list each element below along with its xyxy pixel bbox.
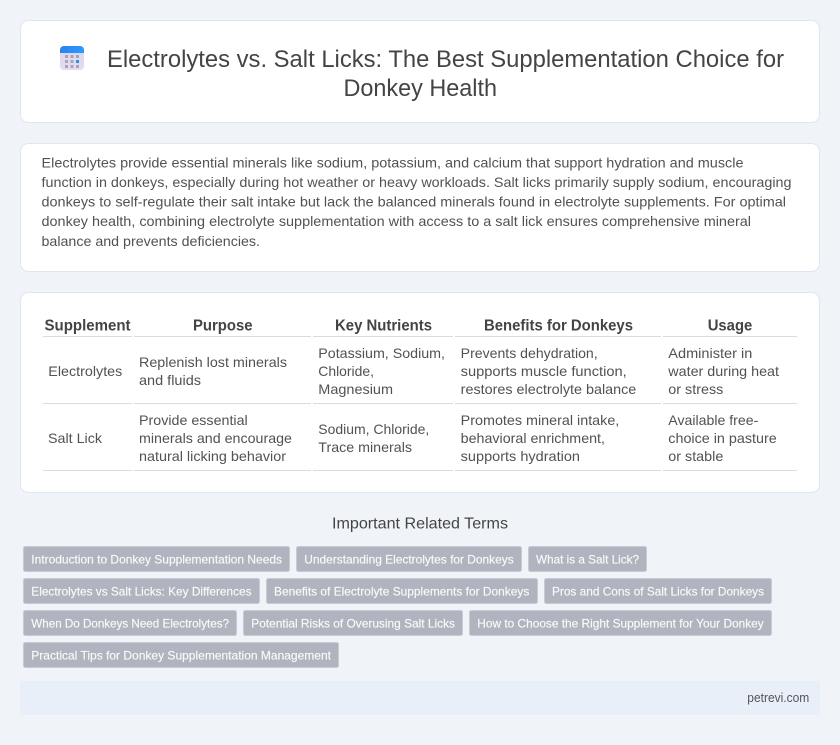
title [107,46,784,102]
tag: When Do Donkeys Need Electrolytes? [31,616,229,630]
table row: electrolytes: Electrolytes [48,363,122,379]
table header row: Key Nutrients [335,318,432,335]
table row: salt lick: minerals and encourage [139,430,292,446]
heading: important related terms: Important Related Terms [332,516,508,532]
table header row: Benefits for Donkeys [484,318,633,335]
table header row: Usage [708,318,752,335]
table row: electrolytes: or stress [668,381,723,397]
panel: header [20,20,820,122]
table header row: Supplement [44,318,131,335]
table row: electrolytes: Magnesium [318,381,393,397]
table row: salt lick: Trace minerals [318,439,412,455]
table row: electrolytes: restores electrolyte balance [461,381,637,397]
tag: Electrolytes vs Salt Licks: Key Differences [31,584,251,598]
tag: Introduction to Donkey Supplementation Needs [31,552,282,566]
text block: intro paragraph: donkeys to self-regulate their salt intake but lack the balanced minerals found in electrolyte supplements. For optimal [42,194,786,210]
table row: salt lick [43,412,797,471]
table row: salt lick: Available free- [668,412,759,428]
panel: related term tags [24,546,772,668]
tag [244,610,462,636]
title: Donkey Health [344,75,497,102]
table row: electrolytes: and fluids [139,372,201,388]
tag: What is a Salt Lick? [536,552,639,566]
table row: electrolytes: Prevents dehydration, [461,345,598,361]
tag: Practical Tips for Donkey Supplementation Management [31,648,332,662]
table row: salt lick: behavioral enrichment, [461,430,605,446]
table row: salt lick: Promotes mineral intake, [461,412,619,428]
icon: calendar [60,46,84,70]
tag [24,546,290,572]
tag: Potential Risks of Overusing Salt Licks [251,616,455,630]
tag [470,610,772,636]
table row: electrolytes: supports muscle function, [461,363,627,379]
table row: electrolytes: Administer in [668,345,752,361]
table row: salt lick: Provide essential [139,412,248,428]
tag [296,546,522,572]
tag: Benefits of Electrolyte Supplements for Donkeys [274,584,529,598]
tag [544,578,772,604]
footer [20,681,820,715]
tag: Understanding Electrolytes for Donkeys [304,552,514,566]
tag [24,610,236,636]
table row: salt lick: supports hydration [461,448,580,464]
table row: salt lick: Salt Lick [48,430,103,446]
tag [24,642,338,668]
table row: salt lick: natural licking behavior [139,448,286,464]
text block: intro paragraph [42,154,792,249]
table header row [43,318,797,337]
table row: salt lick: choice in pasture [668,430,777,446]
table row: electrolytes: Potassium, Sodium, [318,345,445,361]
tag [266,578,538,604]
text block: intro paragraph: donkey health, combining electrolyte supplementation with access to a salt lick ensures comprehensive mineral [42,213,751,229]
table row: electrolytes: water during heat [667,363,779,379]
tag: Pros and Cons of Salt Licks for Donkeys [552,584,764,598]
text block: intro paragraph: balance and prevents deficiencies. [42,233,260,249]
title: Electrolytes vs. Salt Licks: The Best Supplementation Choice for [107,46,784,73]
table row: salt lick: or stable [668,448,724,464]
text block: intro paragraph: function in donkeys, especially during hot weather or heavy workloads. Salt licks primarily supply sodium, encouraging [42,174,792,190]
panel: comparison table [20,292,820,492]
text block: intro paragraph: Electrolytes provide essential minerals like sodium, potassium, and calcium that support hydration and muscle [42,154,744,170]
table header row: Purpose [193,318,253,335]
tag [528,546,646,572]
table row: electrolytes [43,345,797,404]
tag: How to Choose the Right Supplement for Your Donkey [477,616,764,630]
panel: introduction [20,144,820,272]
tag [24,578,260,604]
footer: petrevi.com [747,690,809,705]
table row: electrolytes: Replenish lost minerals [139,354,287,370]
table row: salt lick: Sodium, Chloride, [318,421,429,437]
table row: electrolytes: Chloride, [318,363,374,379]
